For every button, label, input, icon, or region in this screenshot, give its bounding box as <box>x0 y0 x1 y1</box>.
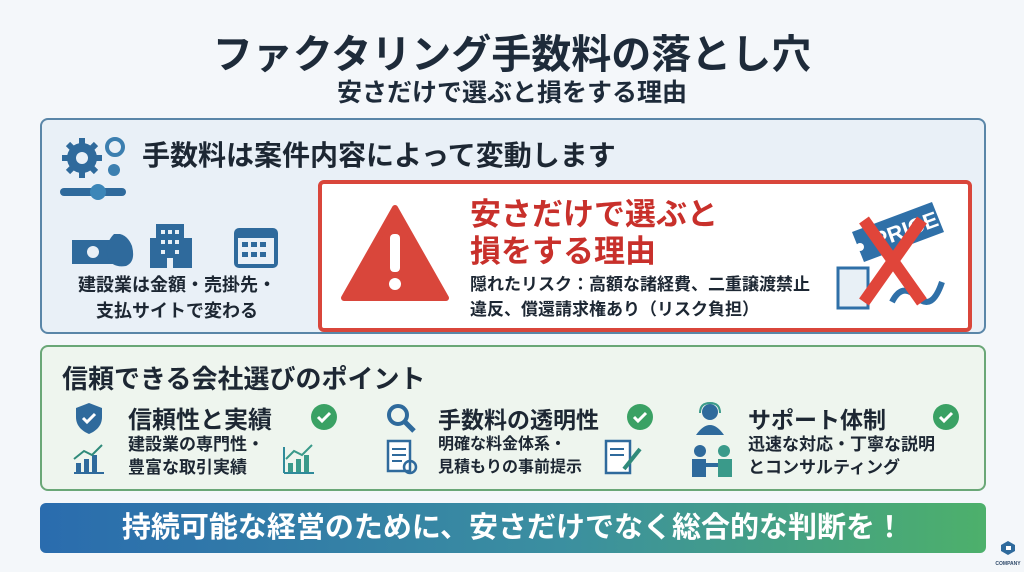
panel: choosing points <box>40 345 986 491</box>
icons: money, building, calendar <box>72 224 278 268</box>
banner: conclusion: 持続可能な経営のために、安さだけでなく総合的な判断を！ <box>122 512 904 544</box>
heading: 手数料は案件内容によって変動します <box>142 140 616 171</box>
logo: company: COMPANY <box>995 561 1021 567</box>
point: support: サポート体制 <box>748 407 886 433</box>
point: support: とコンサルティング <box>748 458 900 477</box>
text: construction varies <box>78 275 276 321</box>
icon: price tag crossed <box>836 202 945 310</box>
point: transparency: 見積もりの事前提示 <box>438 459 582 476</box>
title: ファクタリング手数料の落とし穴 <box>213 33 811 77</box>
risk text: 隠れたリスク：高額な諸経費、二重譲渡禁止 <box>470 275 810 294</box>
logo: company <box>995 541 1021 567</box>
risk text: 違反、償還請求権あり（リスク負担） <box>470 300 759 319</box>
point: reliability <box>73 403 337 477</box>
red title <box>470 197 718 269</box>
text: construction varies: 支払サイトで変わる <box>96 301 258 321</box>
point: reliability: 建設業の専門性・ <box>128 435 264 454</box>
icon: warning triangle <box>341 205 449 301</box>
point: transparency <box>386 404 653 476</box>
subtitle: 安さだけで選ぶと損をする理由 <box>337 79 687 107</box>
text: construction varies: 建設業は金額・売掛先・ <box>78 275 276 295</box>
point: transparency: 明確な料金体系・ <box>438 436 566 453</box>
point: reliability: 豊富な取引実績 <box>128 458 247 477</box>
risk text <box>470 275 810 319</box>
point: support <box>692 402 959 477</box>
red title: 安さだけで選ぶと <box>470 197 718 232</box>
icon: price tag crossed: PRICE <box>870 206 942 253</box>
point: transparency: 手数料の透明性 <box>438 407 599 433</box>
point: support: 迅速な対応・丁寧な説明 <box>748 435 935 454</box>
callout: red warning <box>318 180 972 332</box>
point: reliability: 信頼性と実績 <box>128 407 272 434</box>
red title: 損をする理由 <box>470 234 656 269</box>
panel: fee varies <box>40 118 986 334</box>
banner: conclusion <box>40 503 986 553</box>
heading: 信頼できる会社選びのポイント <box>62 364 425 394</box>
icon: gears and slider <box>60 137 126 200</box>
